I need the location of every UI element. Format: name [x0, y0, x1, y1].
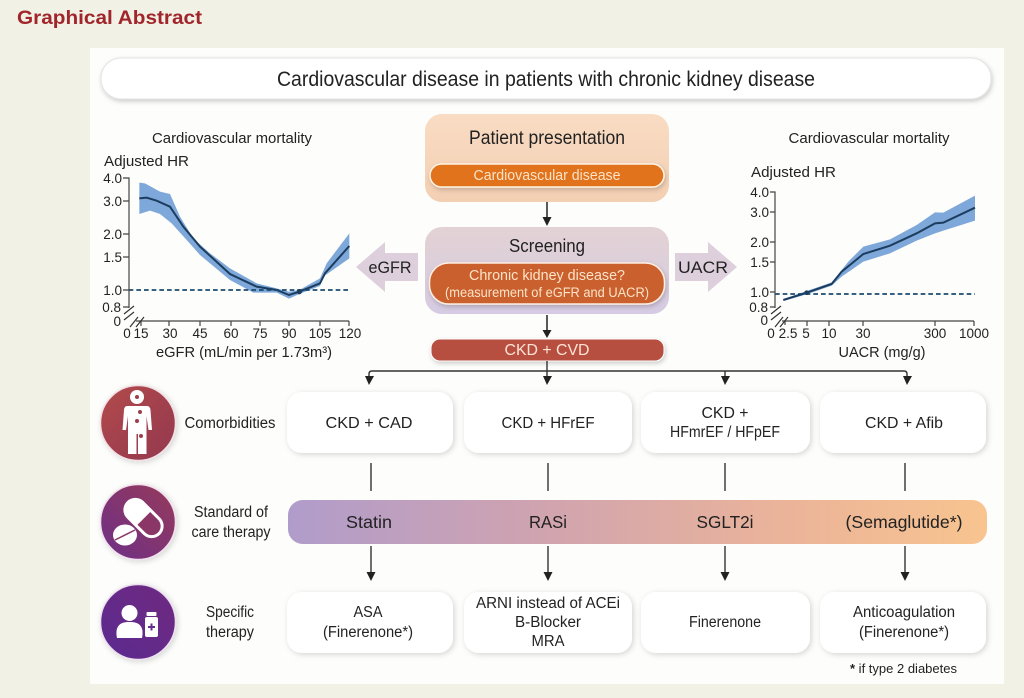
label: specific therapy: Specific [206, 604, 254, 621]
icon: comorbidities person [100, 386, 176, 460]
chart: cardiovascular mortality by eGFR: 4.0 [103, 171, 122, 186]
chart: cardiovascular mortality by UACR: 1.0 [750, 285, 769, 300]
chart: cardiovascular mortality by UACR: 1000 [959, 326, 989, 341]
arrowhead: presentation to screening [542, 217, 552, 226]
chart: cardiovascular mortality by UACR: UACR (mg/g) [838, 344, 926, 361]
specific therapy cards [287, 592, 986, 653]
arrow: presentation to screening [546, 202, 548, 218]
arrowhead: screening to CKD + CVD [542, 330, 552, 338]
chart: cardiovascular mortality by UACR: 0.8 [749, 300, 768, 315]
box: screening [425, 227, 669, 314]
standard of care gradient bar [288, 500, 987, 544]
pill: chronic kidney disease: Chronic kidney disease? [469, 267, 625, 284]
chart: cardiovascular mortality by eGFR: 0.8 [102, 300, 121, 315]
connector lines to therapy bar [371, 463, 905, 491]
chart: cardiovascular mortality by eGFR: 75 [252, 326, 268, 341]
card: CKD + Afib [820, 392, 986, 453]
chart: cardiovascular mortality by UACR: 30 [855, 326, 871, 341]
card: CKD + Afib: CKD + Afib [865, 415, 943, 432]
card: CKD + HFmrEF / HFpEF [641, 392, 810, 453]
card: ARNI, B-Blocker, MRA: B-Blocker [515, 614, 581, 631]
label: specific therapy [206, 604, 254, 641]
box: patient presentation: Patient presentation [469, 128, 625, 149]
branching arrows [365, 361, 912, 385]
chart: cardiovascular mortality by UACR: 4.0 [750, 185, 769, 200]
card: ARNI, B-Blocker, MRA: ARNI instead of ACEi [476, 595, 620, 612]
chart: cardiovascular mortality by UACR: 1.5 [750, 255, 769, 270]
card: ASA: ASA [354, 604, 383, 621]
card: CKD + HFmrEF / HFpEF: HFmrEF / HFpEF [670, 424, 780, 441]
arrow: UACR [675, 242, 737, 292]
pill: cardiovascular disease [430, 164, 664, 187]
confidence band and curve: eGFR [129, 183, 350, 299]
icon: pills [100, 484, 176, 560]
chart: cardiovascular mortality by eGFR: 0 [123, 326, 131, 341]
chart: cardiovascular mortality by UACR: 2.5 [779, 326, 797, 341]
box: screening: Screening [509, 235, 585, 256]
chart: cardiovascular mortality by eGFR [102, 130, 361, 361]
box: patient presentation [425, 114, 669, 202]
chart: cardiovascular mortality by UACR: 10 [821, 326, 837, 341]
arrow: eGFR [356, 242, 418, 292]
chart: cardiovascular mortality by UACR: 2.0 [750, 235, 769, 250]
card: Finerenone [641, 592, 810, 653]
chart: cardiovascular mortality by eGFR: 30 [162, 326, 178, 341]
card: Anticoagulation: Anticoagulation [853, 604, 955, 621]
pill: chronic kidney disease: (measurement of eGFR and UACR) [445, 285, 649, 300]
chart: cardiovascular mortality by UACR: 300 [924, 326, 946, 341]
pill: cardiovascular disease: Cardiovascular disease [474, 168, 620, 184]
arrow: screening to CKD + CVD [546, 315, 548, 331]
confidence band and curve: UACR [775, 196, 975, 301]
heading: Graphical Abstract: Graphical Abstract [17, 7, 203, 29]
chart: cardiovascular mortality by UACR: Adjusted HR [751, 164, 836, 181]
pill: chronic kidney disease [430, 263, 664, 304]
chart: cardiovascular mortality by eGFR: 120 [339, 326, 361, 341]
arrows to specific therapy [366, 546, 910, 581]
chart: cardiovascular mortality by eGFR: 105 [309, 326, 331, 341]
chart: cardiovascular mortality by eGFR: 60 [223, 326, 239, 341]
title banner [101, 58, 991, 99]
chart: cardiovascular mortality by eGFR: eGFR (mL/min per 1.73m³) [156, 344, 332, 361]
standard of care gradient bar: RASi [529, 512, 567, 532]
chart: cardiovascular mortality by UACR: 0 [767, 326, 775, 341]
card: ASA: (Finerenone*) [323, 624, 413, 641]
card: Anticoagulation [820, 592, 986, 653]
card: CKD + HFmrEF / HFpEF: CKD + [702, 405, 748, 422]
chart: cardiovascular mortality by UACR: 3.0 [750, 205, 769, 220]
chart: cardiovascular mortality by eGFR: 1.0 [103, 283, 122, 298]
card: ASA [287, 592, 453, 653]
chart: cardiovascular mortality by eGFR: 45 [192, 326, 208, 341]
standard of care gradient bar: SGLT2i [696, 512, 754, 532]
card: CKD + HFrEF: CKD + HFrEF [502, 415, 594, 432]
label: standard of care therapy: care therapy [192, 524, 271, 541]
chart: cardiovascular mortality by eGFR: 2.0 [103, 227, 122, 242]
card: CKD + CAD: CKD + CAD [326, 415, 412, 432]
card: CKD + HFrEF [464, 392, 632, 453]
chart: cardiovascular mortality by eGFR: 90 [281, 326, 297, 341]
footnote: * if type 2 diabetes [850, 661, 957, 676]
chart: cardiovascular mortality by UACR: 0 [760, 313, 768, 328]
card: ARNI, B-Blocker, MRA [464, 592, 632, 653]
pill: CKD + CVD: CKD + CVD [504, 342, 590, 359]
arrow: eGFR: eGFR [368, 258, 412, 277]
chart: cardiovascular mortality by eGFR: Adjusted HR [104, 153, 189, 170]
label: standard of care therapy: Standard of [194, 504, 269, 521]
icon: patient and medication [100, 584, 176, 660]
chart: cardiovascular mortality by UACR: Cardiovascular mortality [788, 130, 950, 147]
chart: cardiovascular mortality by UACR [749, 130, 989, 361]
label: standard of care therapy [192, 504, 271, 541]
chart: cardiovascular mortality by UACR: 5 [802, 326, 810, 341]
pill: CKD + CVD [431, 339, 664, 361]
card: CKD + CAD [287, 392, 453, 453]
card: ARNI, B-Blocker, MRA: MRA [532, 633, 565, 650]
card: Anticoagulation: (Finerenone*) [859, 624, 949, 641]
chart: cardiovascular mortality by eGFR: Cardiovascular mortality [152, 130, 312, 147]
chart: cardiovascular mortality by eGFR: 1.5 [103, 250, 122, 265]
card: Finerenone: Finerenone [689, 614, 761, 631]
comorbidity cards [287, 392, 986, 453]
label: specific therapy: therapy [206, 624, 254, 641]
arrow: UACR: UACR [678, 258, 728, 277]
chart: cardiovascular mortality by eGFR: 3.0 [103, 194, 122, 209]
chart: cardiovascular mortality by eGFR: 0 [113, 314, 121, 329]
standard of care gradient bar: Statin [346, 512, 392, 532]
standard of care gradient bar: (Semaglutide*) [846, 512, 962, 532]
chart: cardiovascular mortality by eGFR: 15 [133, 326, 149, 341]
title banner: Cardiovascular disease in patients with chronic kidney disease [277, 68, 815, 91]
label: comorbidities: Comorbidities [184, 415, 276, 432]
